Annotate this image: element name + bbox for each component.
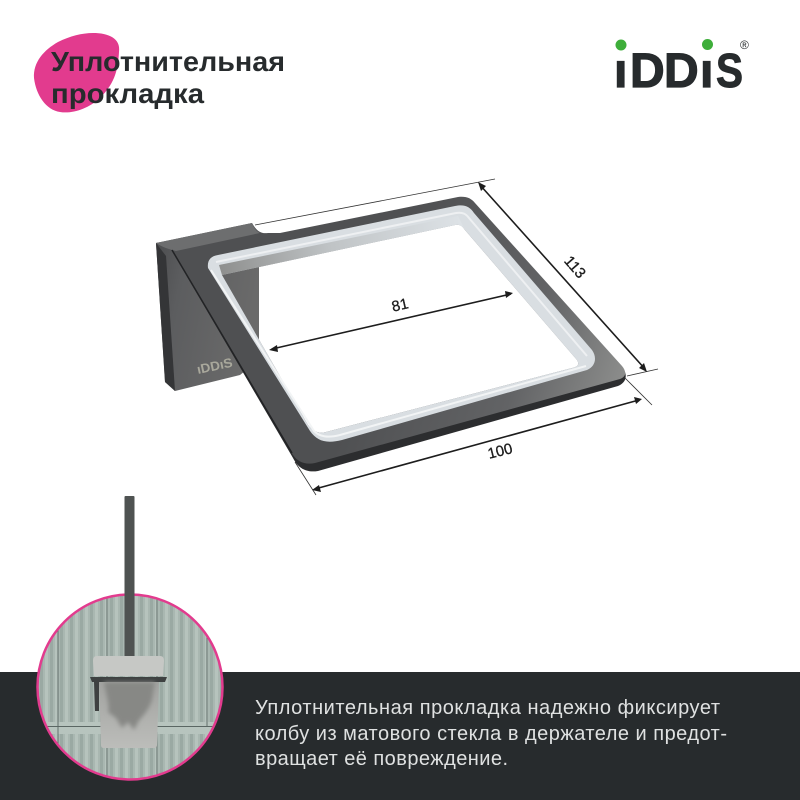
dimension: 113 [255, 179, 658, 376]
wall plate logo: ıDDıS [196, 355, 234, 377]
label: 81 [390, 295, 410, 316]
label: 100 [486, 440, 514, 463]
logo final letter: S [716, 45, 743, 98]
wall plate dark side [156, 243, 175, 391]
extension lines [255, 179, 658, 376]
silicone gasket [208, 205, 595, 442]
gasket inner highlight [216, 213, 587, 356]
frosted glass flask [99, 682, 159, 748]
mounting tab highlight [156, 223, 260, 251]
product: soap dish holder [156, 197, 626, 471]
logo green dots [616, 40, 626, 50]
frame top surface [156, 197, 625, 464]
arrowheads [312, 397, 642, 492]
frame edge highlight [172, 250, 292, 453]
IDDIS logo [614, 38, 749, 98]
dimension line [480, 185, 645, 369]
gasket lower highlight [211, 270, 586, 437]
brush handle [124, 496, 134, 661]
tile wall [35, 590, 225, 785]
glass collar [93, 656, 164, 676]
footer band [0, 672, 800, 800]
gasket translucent top band [219, 216, 465, 275]
body text: Уплотнительная прокладка надежно фиксирует [255, 697, 720, 719]
frame underside [175, 256, 626, 471]
dimension: 100 [295, 378, 652, 495]
label: 113 [560, 253, 589, 282]
pink ring [38, 594, 222, 780]
pink blob [34, 33, 119, 112]
registered mark: ® [740, 38, 749, 52]
dimension: 81 [269, 291, 513, 352]
extension line [295, 378, 652, 495]
heading with pink blob [34, 33, 285, 112]
photo: toilet brush in holder [35, 496, 225, 785]
title: прокладка [51, 78, 204, 109]
wall mounting plate [156, 232, 259, 391]
body text: вращает её повреждение. [255, 748, 508, 770]
dimension line [315, 400, 639, 489]
title: Уплотнительная [51, 46, 285, 77]
dimension line [272, 294, 511, 349]
brush head silhouette [104, 682, 155, 730]
arrowheads [478, 182, 647, 372]
logo wordmark: ıDDı [614, 45, 713, 98]
wall bracket [90, 677, 167, 711]
arrowheads [269, 291, 513, 352]
body text: колбу из матового стекла в держателе и предот- [255, 723, 727, 745]
